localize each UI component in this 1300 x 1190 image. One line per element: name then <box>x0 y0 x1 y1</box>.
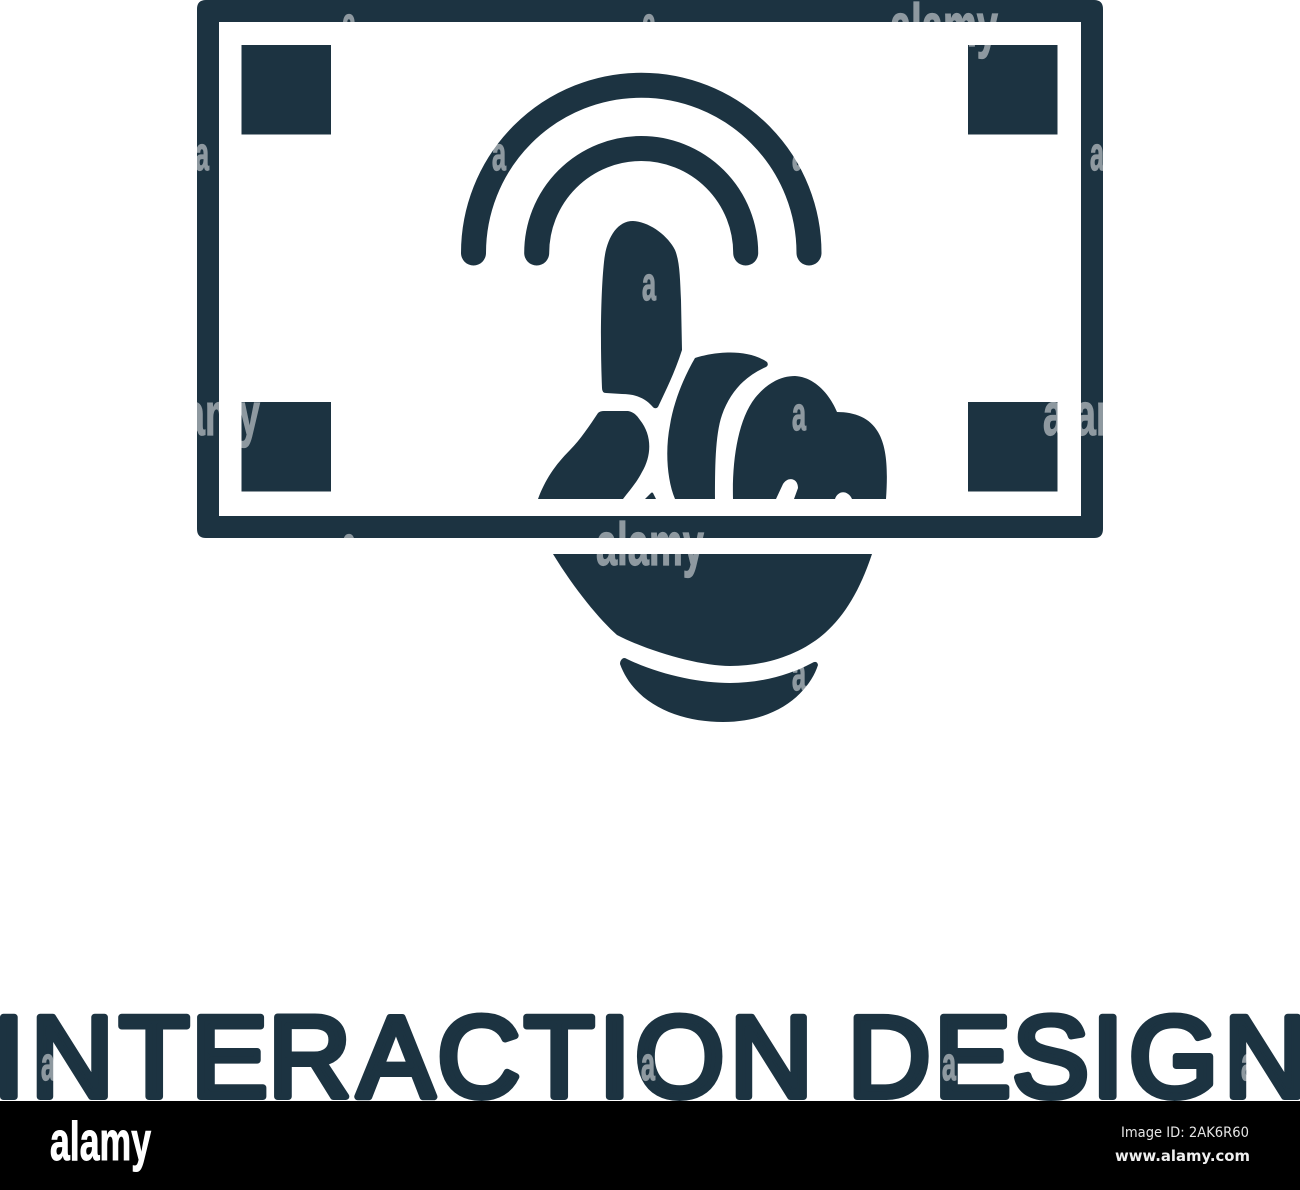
watermarks: a <box>792 387 806 440</box>
watermarks: a <box>342 517 356 570</box>
watermarks: a <box>1090 127 1104 180</box>
hand: small gap detail <box>645 492 656 499</box>
watermarks: a <box>642 257 656 310</box>
watermarks: a <box>1241 1037 1255 1090</box>
screen frame <box>197 0 1103 538</box>
watermarks: a <box>942 1037 956 1090</box>
watermarks: a <box>641 1037 655 1090</box>
website: www.alamy.com <box>1115 1147 1250 1165</box>
hand: thumb <box>538 411 649 499</box>
title: INTERACTION DESIGN <box>0 994 1300 1122</box>
corner markers <box>242 45 1058 492</box>
hand: wrist <box>620 658 818 722</box>
watermarks: alamy <box>1043 381 1151 448</box>
watermarks: a <box>41 1037 55 1090</box>
watermarks: a <box>792 647 806 700</box>
touch signal arcs <box>474 85 809 253</box>
icon: interaction design screen with touch gesture <box>197 0 1103 722</box>
watermarks: a <box>792 127 806 180</box>
hand: curled fingers <box>733 376 887 499</box>
watermarks: alamy <box>152 381 260 448</box>
watermarks: alamy <box>596 511 704 578</box>
watermarks: a <box>492 127 506 180</box>
image id: Image ID: 2AK6R60 <box>1121 1125 1249 1141</box>
hand: pointing finger <box>601 221 682 408</box>
hand: palm <box>553 554 872 666</box>
hand: second finger <box>667 352 768 499</box>
footer logo: alamy <box>50 1110 151 1172</box>
footer bar <box>0 1101 1300 1190</box>
watermarks: a <box>195 127 209 180</box>
